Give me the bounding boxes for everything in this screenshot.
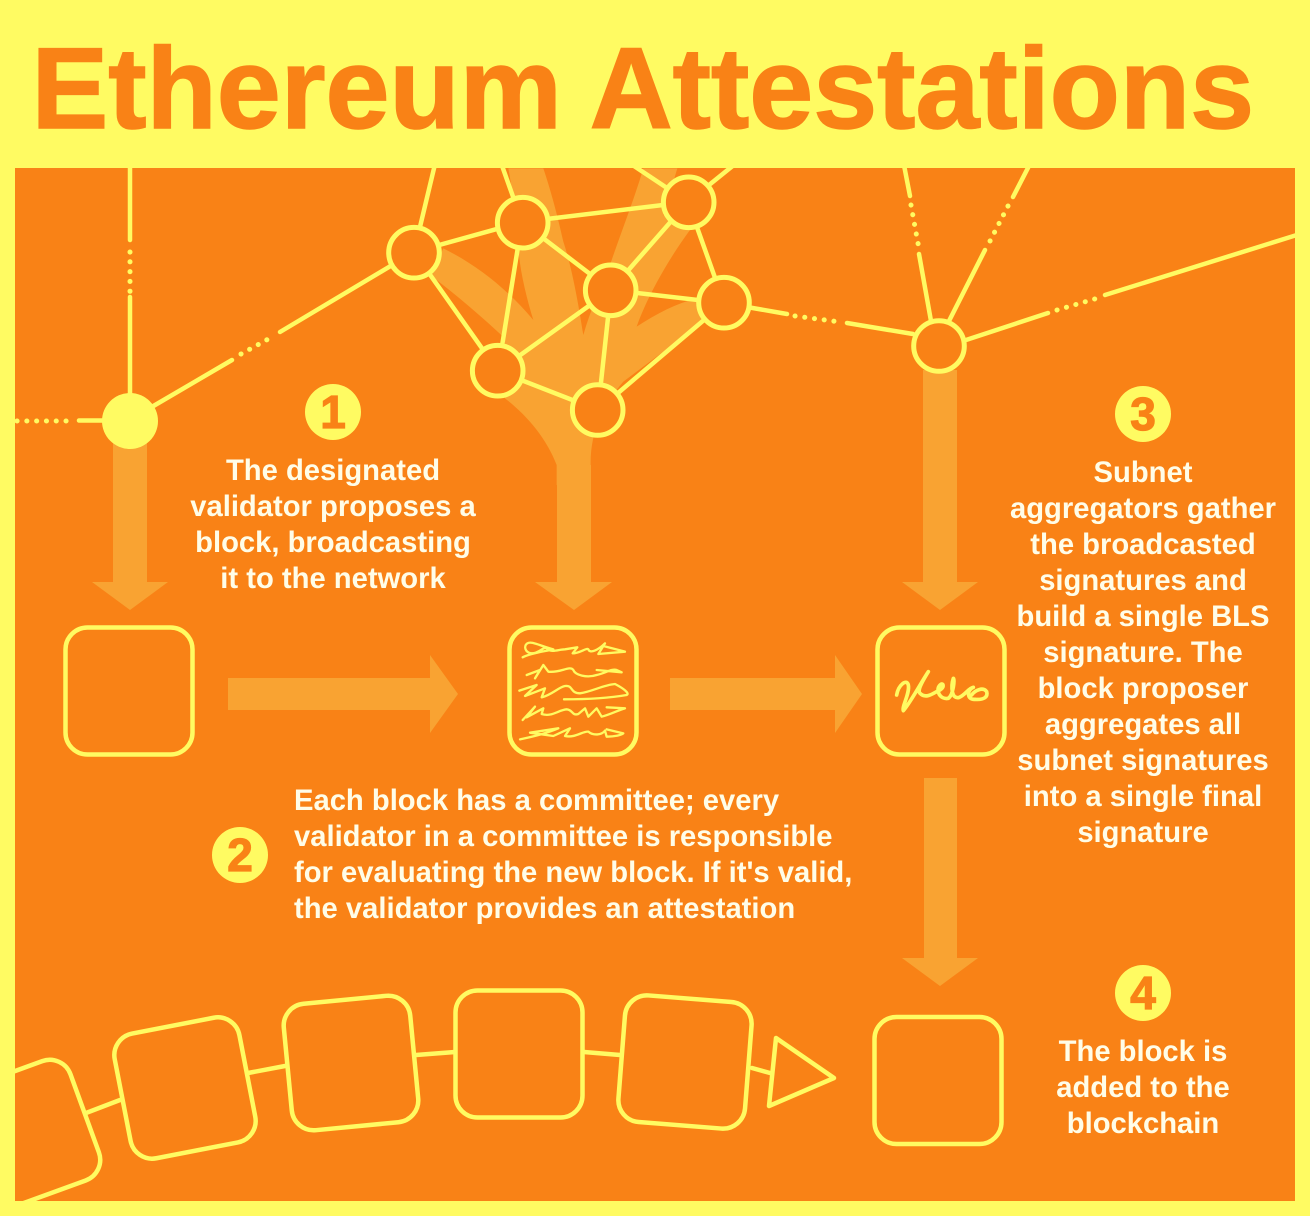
- step 1 number: [305, 384, 361, 440]
- step 2 number: 2: [227, 829, 253, 881]
- step 3 text: [1010, 457, 1276, 849]
- step 1 text: [190, 455, 477, 595]
- step 3 number: [1115, 386, 1171, 442]
- step 2 number: [212, 827, 268, 883]
- step 3 text: into a single final: [1024, 781, 1262, 813]
- step 3 text: signatures and: [1039, 565, 1247, 597]
- block: final, added to chain: [874, 1017, 1002, 1144]
- block: proposed, empty: [66, 628, 192, 754]
- arrow: proposal down to first block: [92, 440, 168, 610]
- network validator nodes: [389, 177, 964, 435]
- step 4 number: 4: [1130, 967, 1156, 1019]
- step 4 text: blockchain: [1067, 1108, 1219, 1140]
- step 2 text: for evaluating the new block. If it's valid,: [294, 857, 852, 889]
- arrow: first block to attested block: [228, 655, 458, 733]
- step 1 text: The designated: [226, 455, 440, 487]
- step 3 text: signature: [1077, 817, 1209, 849]
- step 3 text: the broadcasted: [1030, 529, 1256, 561]
- arrow: signed block down to final block: [902, 778, 978, 986]
- block: with aggregated signature: [878, 628, 1004, 754]
- title: Ethereum Attestations: [32, 25, 1254, 153]
- step 4 text: The block is: [1059, 1036, 1227, 1068]
- diagram: tree of signature flows: [430, 168, 703, 485]
- step 2 text: the validator provides an attestation: [294, 893, 795, 925]
- step 2 text: Each block has a committee; every: [294, 785, 780, 817]
- step 3 text: build a single BLS: [1017, 601, 1269, 633]
- step 1 number: 1: [320, 386, 346, 438]
- step 1 text: validator proposes a: [190, 491, 477, 523]
- icon: proposer validator node: [102, 393, 158, 449]
- step 3 text: aggregates all: [1045, 709, 1241, 741]
- step 3 text: block proposer: [1038, 673, 1248, 705]
- step 1 text: block, broadcasting: [195, 527, 471, 559]
- step 3 number: 3: [1130, 388, 1156, 440]
- step 2 text: [294, 785, 852, 925]
- step 4 number: [1115, 965, 1171, 1021]
- step 3 text: Subnet: [1094, 457, 1193, 489]
- arrow: committee down to attested block: [535, 465, 612, 610]
- step 2 text: validator in a committee is responsible: [294, 821, 833, 853]
- step 3 text: subnet signatures: [1017, 745, 1269, 777]
- block: with many attestation signatures: [510, 628, 636, 754]
- step 3 text: signature. The: [1043, 637, 1243, 669]
- icon: chain arrowhead: [769, 1038, 834, 1106]
- arrow: aggregator down to signed block: [902, 370, 978, 610]
- step 4 text: [1056, 1036, 1230, 1140]
- step 1 text: it to the network: [220, 563, 446, 595]
- blockchain: [0, 990, 770, 1216]
- diagram: network links: [17, 160, 1300, 421]
- step 3 text: aggregators gather: [1010, 493, 1276, 525]
- step 4 text: added to the: [1056, 1072, 1230, 1104]
- arrow: attested block to signed block: [670, 655, 862, 733]
